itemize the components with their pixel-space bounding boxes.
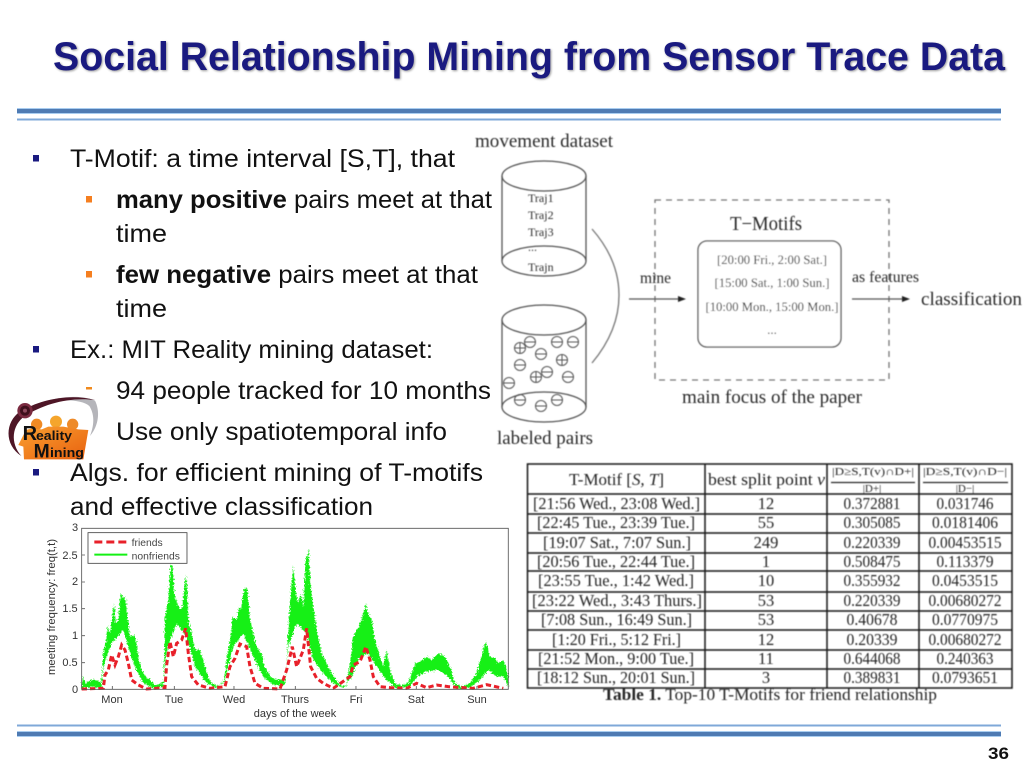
table rows: 0.372881	[844, 494, 900, 513]
table rows: [21:52 Mon., 9:00 Tue.]	[538, 649, 694, 668]
T-Motifs rounded box: [10:00 Mon., 15:00 Mon.]	[706, 299, 838, 314]
cylinder: labeled pairs	[502, 305, 586, 422]
arrow: as features: as features	[852, 269, 919, 286]
series: nonfriends	[82, 549, 508, 688]
table rows: 10	[758, 571, 774, 590]
y axis labels: 0	[72, 684, 78, 696]
y axis labels: 0.5	[62, 657, 78, 669]
table header: |D+|	[863, 483, 881, 495]
y axis title: meeting frequency: freq(t,t)	[46, 539, 58, 675]
cylinder: trajectories: Traj3	[528, 225, 554, 239]
logo: Reality Mining: ining	[50, 446, 84, 460]
cylinder: trajectories: ...	[528, 240, 537, 254]
T-Motifs rounded box: [20:00 Fri., 2:00 Sat.]	[717, 252, 827, 267]
bullet: T-Motif: T-Motif: a time interval [S,T], that	[70, 145, 455, 173]
table rows: 0.644068	[844, 649, 900, 668]
table: top-10 T-Motifs	[527, 464, 1012, 704]
T-Motifs rounded box: [15:00 Sat., 1:00 Sun.]	[714, 275, 830, 290]
table header	[569, 466, 1008, 495]
bullet: algorithms: Algs. for efficient mining of T-motifs	[70, 459, 483, 487]
chart plot area	[82, 528, 508, 689]
table rows: 1	[762, 552, 770, 571]
page number: 36	[988, 744, 1009, 763]
table rows: 0.113379	[936, 552, 994, 571]
table rows: [22:45 Tue., 23:39 Tue.]	[537, 513, 695, 532]
x axis title: days of the week	[254, 708, 337, 720]
table rows: [23:55 Tue., 1:42 Wed.]	[538, 571, 694, 590]
x axis labels: Wed	[223, 694, 245, 706]
T-Motifs heading: T−Motifs	[730, 213, 802, 235]
table rows: 0.305085	[844, 513, 900, 532]
logo: Reality Mining: M	[34, 442, 50, 463]
dashed box	[655, 200, 889, 380]
title: Social Relationship Mining from Sensor Trace Data	[53, 35, 1006, 79]
table rows: [19:07 Sat., 7:07 Sun.]	[543, 533, 691, 552]
x axis labels: Thurs	[281, 694, 310, 706]
table rows: [21:56 Wed., 23:08 Wed.]	[533, 494, 700, 513]
table rows: 3	[762, 668, 770, 687]
table rows: 0.355932	[844, 571, 900, 590]
x axis labels: Sat	[408, 694, 424, 706]
cylinder: trajectories: Trajn	[528, 260, 554, 274]
table rows: 0.031746	[936, 494, 994, 513]
cylinder: trajectories	[502, 161, 586, 276]
top divider	[17, 108, 1001, 120]
logo: Reality Mining	[9, 397, 98, 463]
bottom divider	[17, 724, 1001, 737]
table rows: [7:08 Sun., 16:49 Sun.]	[541, 610, 692, 629]
label: movement dataset: movement dataset	[475, 131, 614, 152]
x axis labels: Sun	[467, 694, 487, 706]
logo: Reality Mining: R	[23, 423, 38, 445]
table rows: 0.00680272	[928, 591, 1002, 610]
table rows: 0.220339	[844, 533, 900, 552]
table grid	[527, 464, 1012, 688]
table rows: 0.0453515	[932, 571, 998, 590]
sub-bullet: few negative: few negative pairs meet at that	[116, 261, 478, 289]
label: labeled pairs: labeled pairs	[497, 428, 593, 449]
y axis labels: 1	[72, 630, 78, 642]
table header: |D−|	[956, 483, 974, 495]
bullet: MIT dataset: Ex.: MIT Reality mining dataset:	[70, 336, 433, 364]
table rows: 12	[758, 494, 774, 513]
cylinder: trajectories: Traj1	[528, 191, 554, 205]
legend: friends	[132, 538, 163, 549]
table header: |D≥S,T(v)∩D−|	[923, 466, 1007, 478]
table rows: [23:22 Wed., 3:43 Thurs.]	[532, 591, 702, 610]
sub-bullet: few negative	[86, 261, 478, 323]
table header: best split point v	[708, 470, 826, 489]
table rows: 53	[758, 610, 774, 629]
table rows: 0.0793651	[932, 668, 998, 687]
table rows: 55	[758, 513, 774, 532]
y axis labels: 2	[72, 576, 78, 588]
bullet: algorithms	[33, 459, 483, 521]
x axis labels: Tue	[165, 694, 183, 706]
T-Motifs rounded box	[698, 241, 841, 347]
table rows: 12	[758, 630, 774, 649]
table rows: 0.00453515	[928, 533, 1002, 552]
bullet list	[33, 145, 492, 521]
x axis labels: Fri	[350, 694, 362, 706]
table rows: [20:56 Tue., 22:44 Tue.]	[537, 552, 695, 571]
y axis labels: 2.5	[62, 550, 78, 562]
x axis labels	[101, 694, 487, 706]
legend	[88, 533, 187, 563]
y axis labels	[62, 522, 78, 696]
table rows: 0.20339	[846, 630, 898, 649]
sub-bullet: spatiotemporal: Use only spatiotemporal info	[116, 418, 447, 446]
sub-bullet: many positive: time	[116, 220, 167, 248]
table rows: 11	[758, 649, 774, 668]
table rows: 0.389831	[844, 668, 900, 687]
table rows: 0.220339	[844, 591, 900, 610]
sub-bullet: few negative: time	[116, 295, 167, 323]
table rows: 0.0181406	[932, 513, 998, 532]
logo: Reality Mining: eality	[36, 429, 72, 443]
bullet: algorithms: and effective classification	[70, 493, 373, 521]
cylinder: trajectories: Traj2	[528, 208, 554, 222]
table rows: 0.40678	[846, 610, 898, 629]
y axis labels: 1.5	[62, 603, 78, 615]
table header: T-Motif [S, T]	[569, 470, 664, 489]
table header: |D≥S,T(v)∩D+|	[832, 466, 914, 478]
arrow: as features	[852, 269, 919, 302]
table rows: 0.240363	[936, 649, 994, 668]
bracket arc	[592, 229, 619, 363]
table rows: 249	[754, 533, 778, 552]
sub-bullet: 94 people: 94 people tracked for 10 months	[116, 377, 491, 405]
y axis labels: 3	[72, 522, 78, 534]
x axis labels: Mon	[101, 694, 123, 706]
diagram: T-Motifs pipeline	[475, 131, 1022, 449]
table rows: 0.0770975	[932, 610, 998, 629]
label: main focus: main focus of the paper	[682, 387, 863, 408]
sub-bullet: many positive: many positive pairs meet at that	[116, 186, 492, 214]
series: friends	[82, 628, 503, 689]
table rows: 53	[758, 591, 774, 610]
label: classification: classification	[921, 289, 1022, 310]
table rows: 0.508475	[844, 552, 900, 571]
table rows: [18:12 Sun., 20:01 Sun.]	[537, 668, 695, 687]
table caption: Table 1. Top-10 T-Motifs for friend relationship	[603, 685, 937, 704]
table rows	[532, 494, 1002, 687]
T-Motifs rounded box: ...	[767, 322, 777, 337]
chart: meeting frequency	[46, 522, 508, 720]
table rows: 0.00680272	[928, 630, 1002, 649]
arrow: mine: mine	[640, 270, 671, 287]
table rows: [1:20 Fri., 5:12 Fri.]	[552, 630, 681, 649]
sub-bullet: many positive	[86, 186, 492, 248]
chart frame and ticks	[82, 528, 508, 689]
legend: nonfriends	[132, 551, 180, 562]
arrow: mine	[629, 270, 686, 302]
